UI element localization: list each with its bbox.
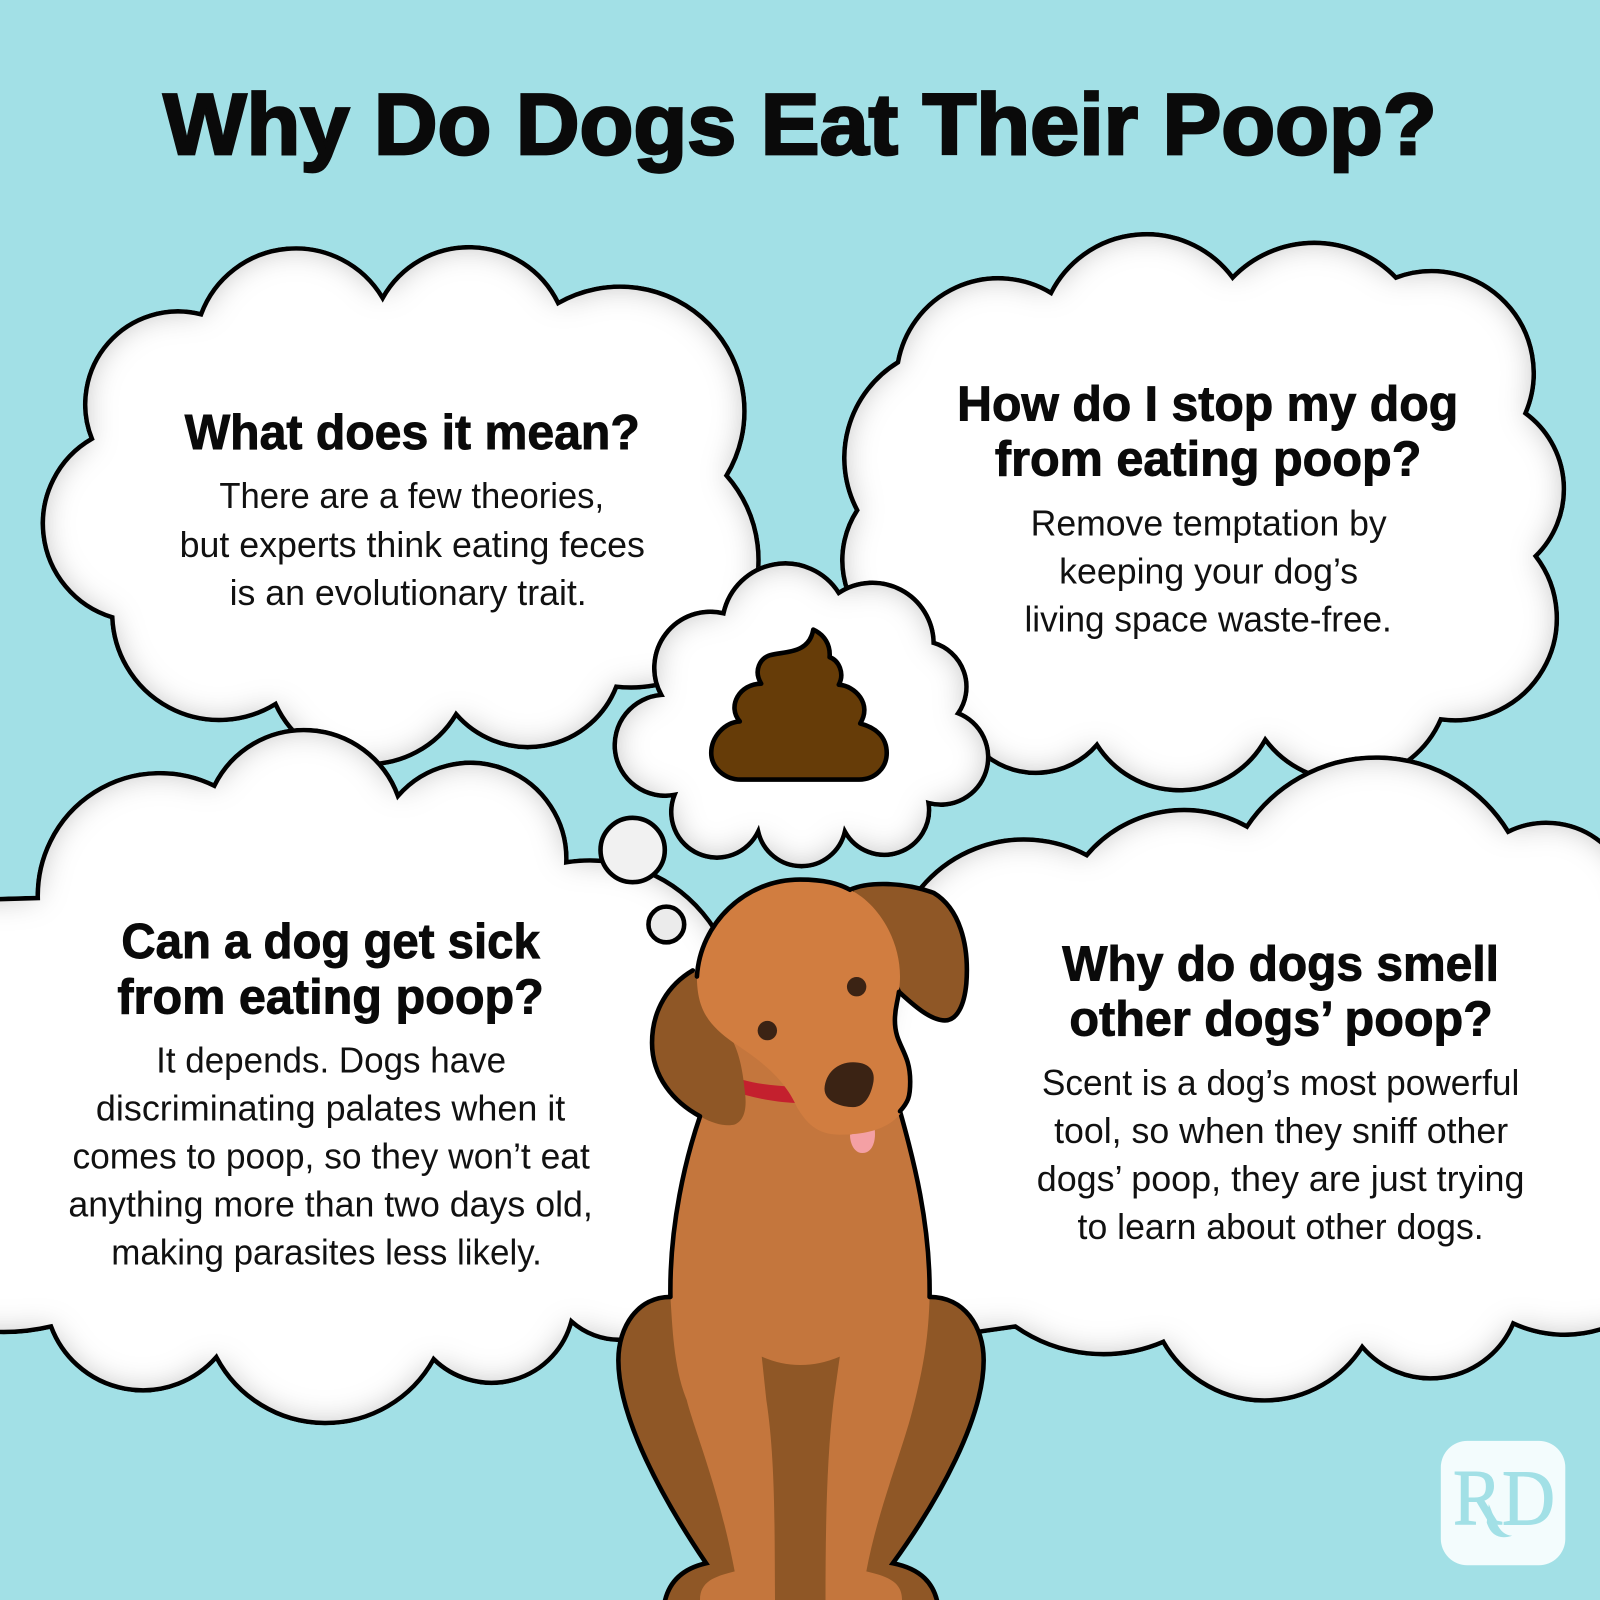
eye left (758, 1021, 777, 1040)
heading: how do I stop my dog: How do I stop my dog (957, 377, 1458, 431)
panel: why do dogs smell (816, 758, 1600, 1401)
logo: RD (1441, 1441, 1565, 1565)
head outline (697, 880, 910, 1111)
text: why do dogs smell body: to learn about other dogs. (1078, 1207, 1484, 1247)
heading: why do dogs smell: Why do dogs smell (1062, 938, 1499, 992)
text: what does it mean body: but experts think eating feces (180, 525, 645, 565)
body (670, 1020, 930, 1600)
nose (824, 1062, 874, 1107)
title: Why Do Dogs Eat Their Poop? (163, 76, 1437, 173)
text: can a dog get sick body: It depends. Dogs have (156, 1040, 506, 1080)
haunches and paws (618, 1297, 984, 1600)
logo: RD: RD (1453, 1454, 1555, 1542)
heading: why do dogs smell (1062, 938, 1499, 1047)
text: can a dog get sick body: making parasites less likely. (111, 1232, 542, 1272)
left ear outline (652, 970, 700, 1116)
panel: what does it mean (43, 247, 759, 764)
text: how do I stop my dog body: keeping your dog’s (1059, 552, 1358, 592)
thought bubble small (648, 907, 684, 942)
heading: can a dog get sick: Can a dog get sick (121, 915, 541, 969)
heading: what does it mean: What does it mean? (185, 406, 640, 460)
text: can a dog get sick body: discriminating palates when it (96, 1088, 565, 1128)
panel: how do I stop my dog (842, 234, 1564, 790)
text: what does it mean body (180, 476, 645, 613)
heading: can a dog get sick: from eating poop? (117, 970, 544, 1024)
head (697, 880, 910, 1135)
dog illustration (618, 880, 984, 1600)
text: how do I stop my dog body: Remove temptation by (1031, 504, 1387, 544)
text: can a dog get sick body: anything more than two days old, (68, 1184, 593, 1224)
heading: how do I stop my dog (957, 377, 1458, 487)
heading: why do dogs smell: other dogs’ poop? (1069, 993, 1493, 1047)
collar (742, 1080, 796, 1103)
text: can a dog get sick body: comes to poop, so they won’t eat (72, 1136, 590, 1176)
text: what does it mean body: is an evolutionary trait. (230, 573, 587, 613)
icon: poop (711, 630, 887, 780)
heading: how do I stop my dog: from eating poop? (995, 433, 1421, 487)
right ear (850, 884, 967, 1020)
body outline (670, 1111, 930, 1297)
eye right (847, 977, 866, 996)
heading: can a dog get sick (117, 915, 544, 1024)
panel: can a dog get sick (0, 730, 738, 1423)
text: how do I stop my dog body (1024, 504, 1392, 640)
text: why do dogs smell body (1037, 1063, 1524, 1247)
text: can a dog get sick body (68, 1040, 593, 1272)
text: how do I stop my dog body: living space waste-free. (1024, 600, 1392, 640)
thought cloud with poop (615, 563, 988, 866)
text: why do dogs smell body: dogs’ poop, they are just trying (1037, 1159, 1524, 1199)
left ear (652, 970, 746, 1125)
text: why do dogs smell body: Scent is a dog’s most powerful (1042, 1063, 1519, 1103)
text: what does it mean body: There are a few theories, (219, 476, 604, 516)
text: why do dogs smell body: tool, so when they sniff other (1054, 1111, 1508, 1151)
thought bubble large (601, 818, 665, 882)
tongue (850, 1128, 875, 1153)
